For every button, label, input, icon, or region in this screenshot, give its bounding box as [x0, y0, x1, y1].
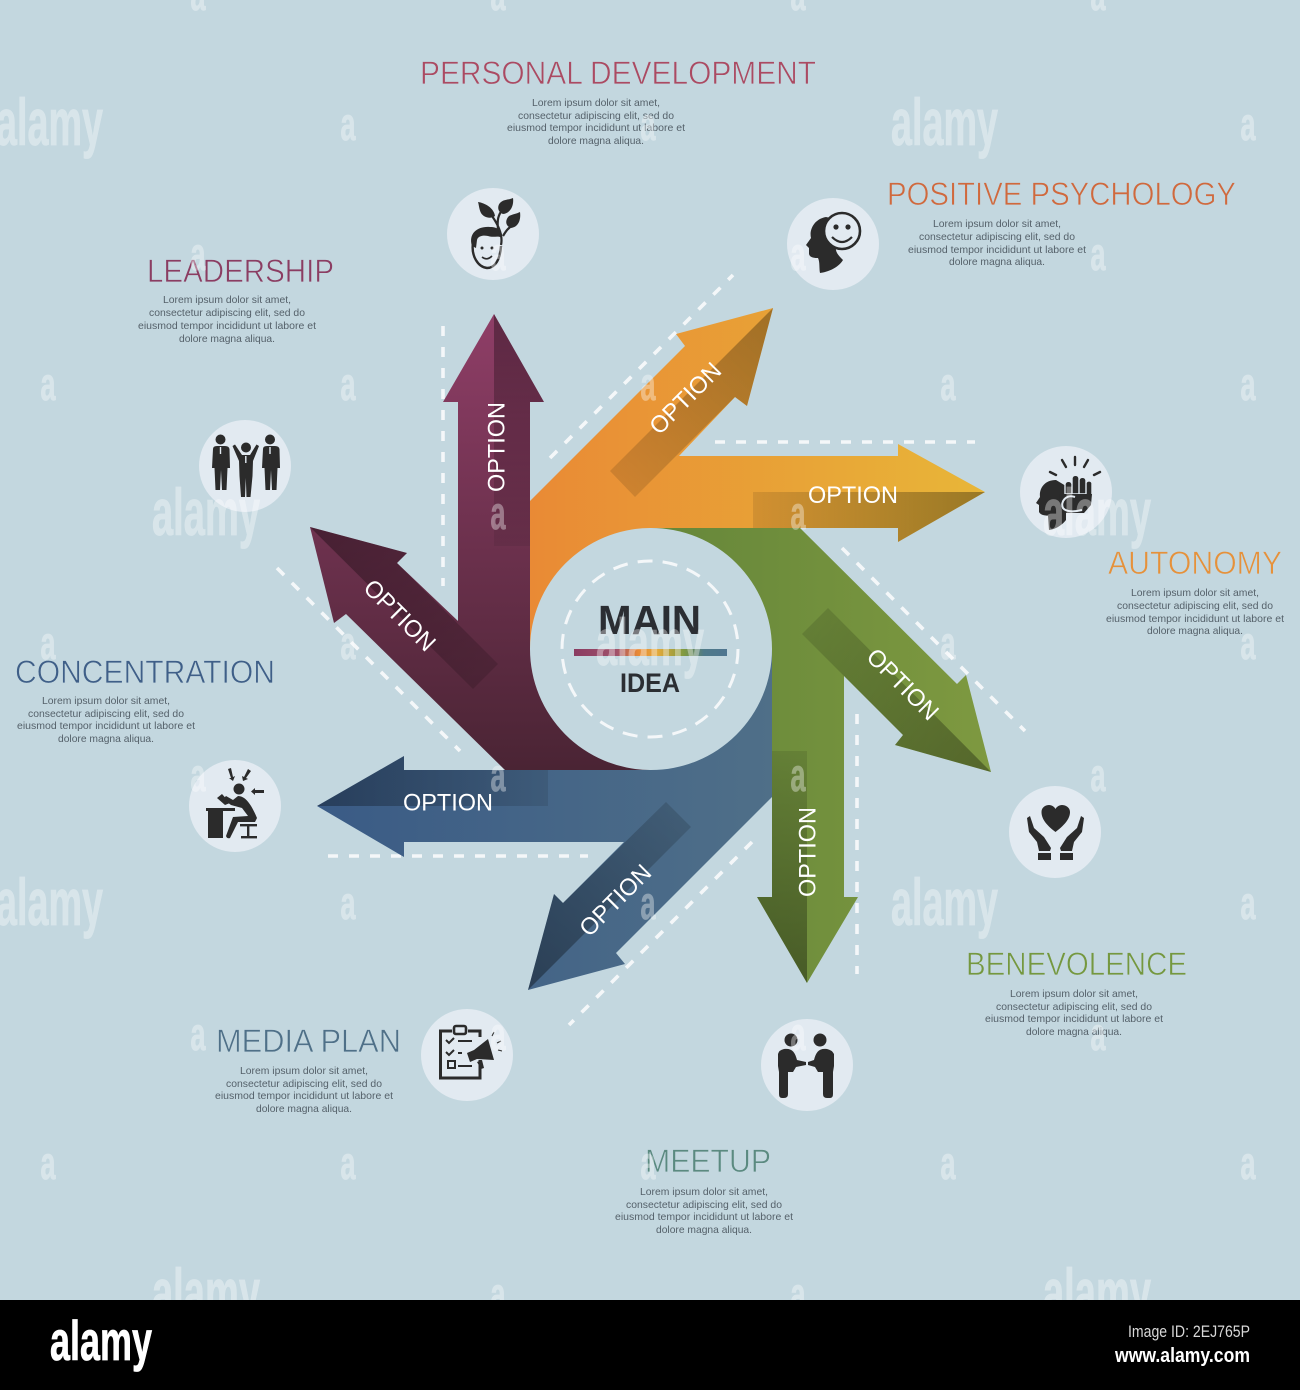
site url: www.alamy.com: [1114, 1345, 1250, 1367]
body: [615, 1186, 793, 1236]
watermark: alamy pattern: a: [790, 487, 806, 539]
option label south-west: OPTION: [574, 859, 657, 942]
body: dolore magna aliqua.: [656, 1224, 752, 1236]
body: eiusmod tempor incididunt ut labore et: [615, 1211, 793, 1223]
text block: benevolence: [966, 946, 1187, 1038]
watermark: alamy pattern: alamy: [152, 1255, 260, 1329]
body: consectetur adipiscing elit, sed do: [996, 1001, 1152, 1013]
arrows: green pair: [650, 528, 991, 983]
body: consectetur adipiscing elit, sed do: [518, 110, 674, 122]
body: eiusmod tempor incididunt ut labore et: [507, 122, 685, 134]
watermark: alamy pattern: a: [490, 487, 506, 539]
body: eiusmod tempor incididunt ut labore et: [215, 1090, 393, 1102]
heading: PERSONAL DEVELOPMENT: [420, 55, 816, 91]
body: dolore magna aliqua.: [256, 1103, 352, 1115]
body: [908, 218, 1086, 268]
watermark: alamy pattern: a: [490, 228, 506, 280]
watermark: alamy pattern: a: [340, 98, 356, 150]
text block: personal development: [420, 55, 816, 147]
image id: Image ID: 2EJ765P: [1128, 1322, 1250, 1341]
body: consectetur adipiscing elit, sed do: [626, 1199, 782, 1211]
orange arrow shape: [530, 308, 985, 649]
body: consectetur adipiscing elit, sed do: [226, 1078, 382, 1090]
body: [215, 1065, 393, 1115]
body: dolore magna aliqua.: [179, 333, 275, 345]
main word: MAIN: [598, 597, 701, 643]
text block: concentration: [15, 654, 275, 745]
body: consectetur adipiscing elit, sed do: [1117, 600, 1273, 612]
text block: meetup: [615, 1143, 793, 1236]
up arrow shade: [494, 314, 544, 546]
watermark: alamy pattern: a: [490, 749, 506, 801]
heading: AUTONOMY: [1108, 545, 1282, 581]
heading: MEDIA PLAN: [216, 1023, 401, 1059]
body: [507, 97, 685, 147]
watermark: alamy pattern: a: [340, 877, 356, 929]
text block: autonomy: [1106, 545, 1284, 637]
body: Lorem ipsum dolor sit amet,: [640, 1186, 768, 1198]
body: eiusmod tempor incididunt ut labore et: [138, 320, 316, 332]
icon: clipboard and megaphone: [421, 1009, 513, 1101]
watermark: alamy pattern: alamy: [891, 85, 998, 159]
option label north-east: OPTION: [644, 357, 727, 440]
dashed guide lines: [277, 275, 1025, 1025]
heading: BENEVOLENCE: [966, 946, 1187, 982]
watermark: alamy pattern: a: [1090, 228, 1106, 280]
watermark: alamy pattern: a: [40, 358, 56, 410]
watermark: alamy pattern: a: [190, 749, 206, 801]
watermark: alamy pattern: a: [1240, 877, 1256, 929]
heading: LEADERSHIP: [147, 253, 334, 289]
watermark: alamy pattern: a: [640, 358, 656, 410]
body: consectetur adipiscing elit, sed do: [28, 708, 184, 720]
watermark: alamy pattern: a: [40, 617, 56, 669]
watermark: alamy pattern: a: [340, 1137, 356, 1189]
center: main idea: [562, 561, 738, 737]
icon: stressed person at desk: [189, 760, 281, 852]
watermark: alamy pattern: a: [340, 358, 356, 410]
maroon arrow shape: [310, 314, 650, 770]
north-west arrow shade: [310, 527, 498, 689]
east arrow shade: [753, 492, 985, 542]
body: eiusmod tempor incididunt ut labore et: [908, 244, 1086, 256]
body: dolore magna aliqua.: [58, 733, 154, 745]
body: eiusmod tempor incididunt ut labore et: [1106, 613, 1284, 625]
watermark: alamy pattern: a: [1090, 1008, 1106, 1060]
watermark: alamy pattern: a: [940, 617, 956, 669]
body: Lorem ipsum dolor sit amet,: [1010, 988, 1138, 1000]
watermark: alamy pattern: a: [190, 1008, 206, 1060]
footer band: [0, 1300, 1300, 1390]
watermark: alamy pattern: a: [340, 617, 356, 669]
arrows: maroon pair: [310, 314, 650, 770]
watermark: alamy pattern: a: [40, 1137, 56, 1189]
watermark: alamy pattern: a: [1240, 617, 1256, 669]
option label south-east: OPTION: [861, 643, 944, 726]
body: Lorem ipsum dolor sit amet,: [163, 294, 291, 306]
heading: POSITIVE PSYCHOLOGY: [887, 176, 1236, 212]
body: consectetur adipiscing elit, sed do: [149, 307, 305, 319]
body: Lorem ipsum dolor sit amet,: [42, 695, 170, 707]
body: [17, 695, 195, 745]
icon: person with growing plant: [447, 188, 539, 280]
text block: positive psychology: [887, 176, 1236, 268]
icon: three business men: [199, 420, 291, 512]
body: [138, 294, 316, 345]
watermark: alamy pattern: a: [640, 877, 656, 929]
icon: two people shaking hands: [761, 1019, 853, 1111]
watermark: alamy pattern: a: [790, 1008, 806, 1060]
icon: head with smiley: [787, 198, 879, 290]
south-west arrow shade: [528, 802, 691, 990]
watermark: alamy pattern: a: [790, 749, 806, 801]
body: [1106, 587, 1284, 637]
body: consectetur adipiscing elit, sed do: [919, 231, 1075, 243]
icon: hands holding heart: [1009, 786, 1101, 878]
south arrow shade: [757, 751, 807, 983]
option label east: OPTION: [808, 482, 898, 509]
dashed ring: [562, 561, 738, 737]
green arrow shape: [650, 528, 991, 983]
watermark: alamy pattern: a: [940, 358, 956, 410]
footer logo: alamy: [50, 1309, 152, 1372]
watermark: alamy pattern: a: [490, 1008, 506, 1060]
body: Lorem ipsum dolor sit amet,: [933, 218, 1061, 230]
body: dolore magna aliqua.: [548, 135, 644, 147]
body: Lorem ipsum dolor sit amet,: [532, 97, 660, 109]
icon: head with raised fist: [1020, 446, 1112, 538]
option label west: OPTION: [403, 790, 493, 816]
arrows: blue pair: [317, 649, 772, 990]
watermark: alamy pattern: alamy: [0, 865, 103, 939]
watermark: alamy pattern: a: [1090, 749, 1106, 801]
body: Lorem ipsum dolor sit amet,: [1131, 587, 1259, 599]
watermark: alamy pattern: a: [790, 228, 806, 280]
watermark: alamy pattern: a: [1240, 358, 1256, 410]
watermark: alamy pattern: alamy: [0, 85, 103, 159]
watermark: alamy pattern: a: [490, 1268, 506, 1320]
heading: CONCENTRATION: [15, 654, 275, 690]
watermark: alamy pattern: alamy: [891, 865, 998, 939]
west arrow shade: [317, 756, 548, 806]
watermark: alamy pattern: a: [190, 228, 206, 280]
watermark: alamy pattern: a: [640, 1137, 656, 1189]
body: dolore magna aliqua.: [1147, 625, 1243, 637]
watermark: alamy pattern: a: [790, 1268, 806, 1320]
body: Lorem ipsum dolor sit amet,: [240, 1065, 368, 1077]
body: eiusmod tempor incididunt ut labore et: [985, 1013, 1163, 1025]
watermark: alamy pattern: a: [640, 98, 656, 150]
body: eiusmod tempor incididunt ut labore et: [17, 720, 195, 732]
option label north-west: OPTION: [358, 574, 441, 657]
text block: media plan: [215, 1023, 401, 1115]
watermark: alamy pattern: alamy: [596, 605, 704, 679]
watermark: alamy pattern: alamy: [152, 475, 260, 549]
body: dolore magna aliqua.: [949, 256, 1045, 268]
heading: MEETUP: [645, 1143, 771, 1179]
watermark: alamy pattern: a: [1240, 98, 1256, 150]
arrows: orange pair: [530, 308, 985, 649]
option label south: OPTION: [794, 807, 822, 897]
body: dolore magna aliqua.: [1026, 1026, 1122, 1038]
idea word: IDEA: [620, 668, 680, 698]
watermark: alamy pattern: alamy: [1043, 1255, 1151, 1329]
colour bar: [574, 649, 727, 656]
option label up: OPTION: [484, 402, 510, 492]
watermark: alamy pattern: a: [1240, 1137, 1256, 1189]
south-east arrow shade: [802, 608, 991, 772]
north-east arrow shade: [610, 308, 773, 497]
blue arrow shape: [317, 649, 772, 990]
watermark: alamy pattern: alamy: [1043, 475, 1151, 549]
body: [985, 988, 1163, 1038]
watermark: alamy pattern: a: [940, 1137, 956, 1189]
text block: leadership: [138, 253, 334, 345]
